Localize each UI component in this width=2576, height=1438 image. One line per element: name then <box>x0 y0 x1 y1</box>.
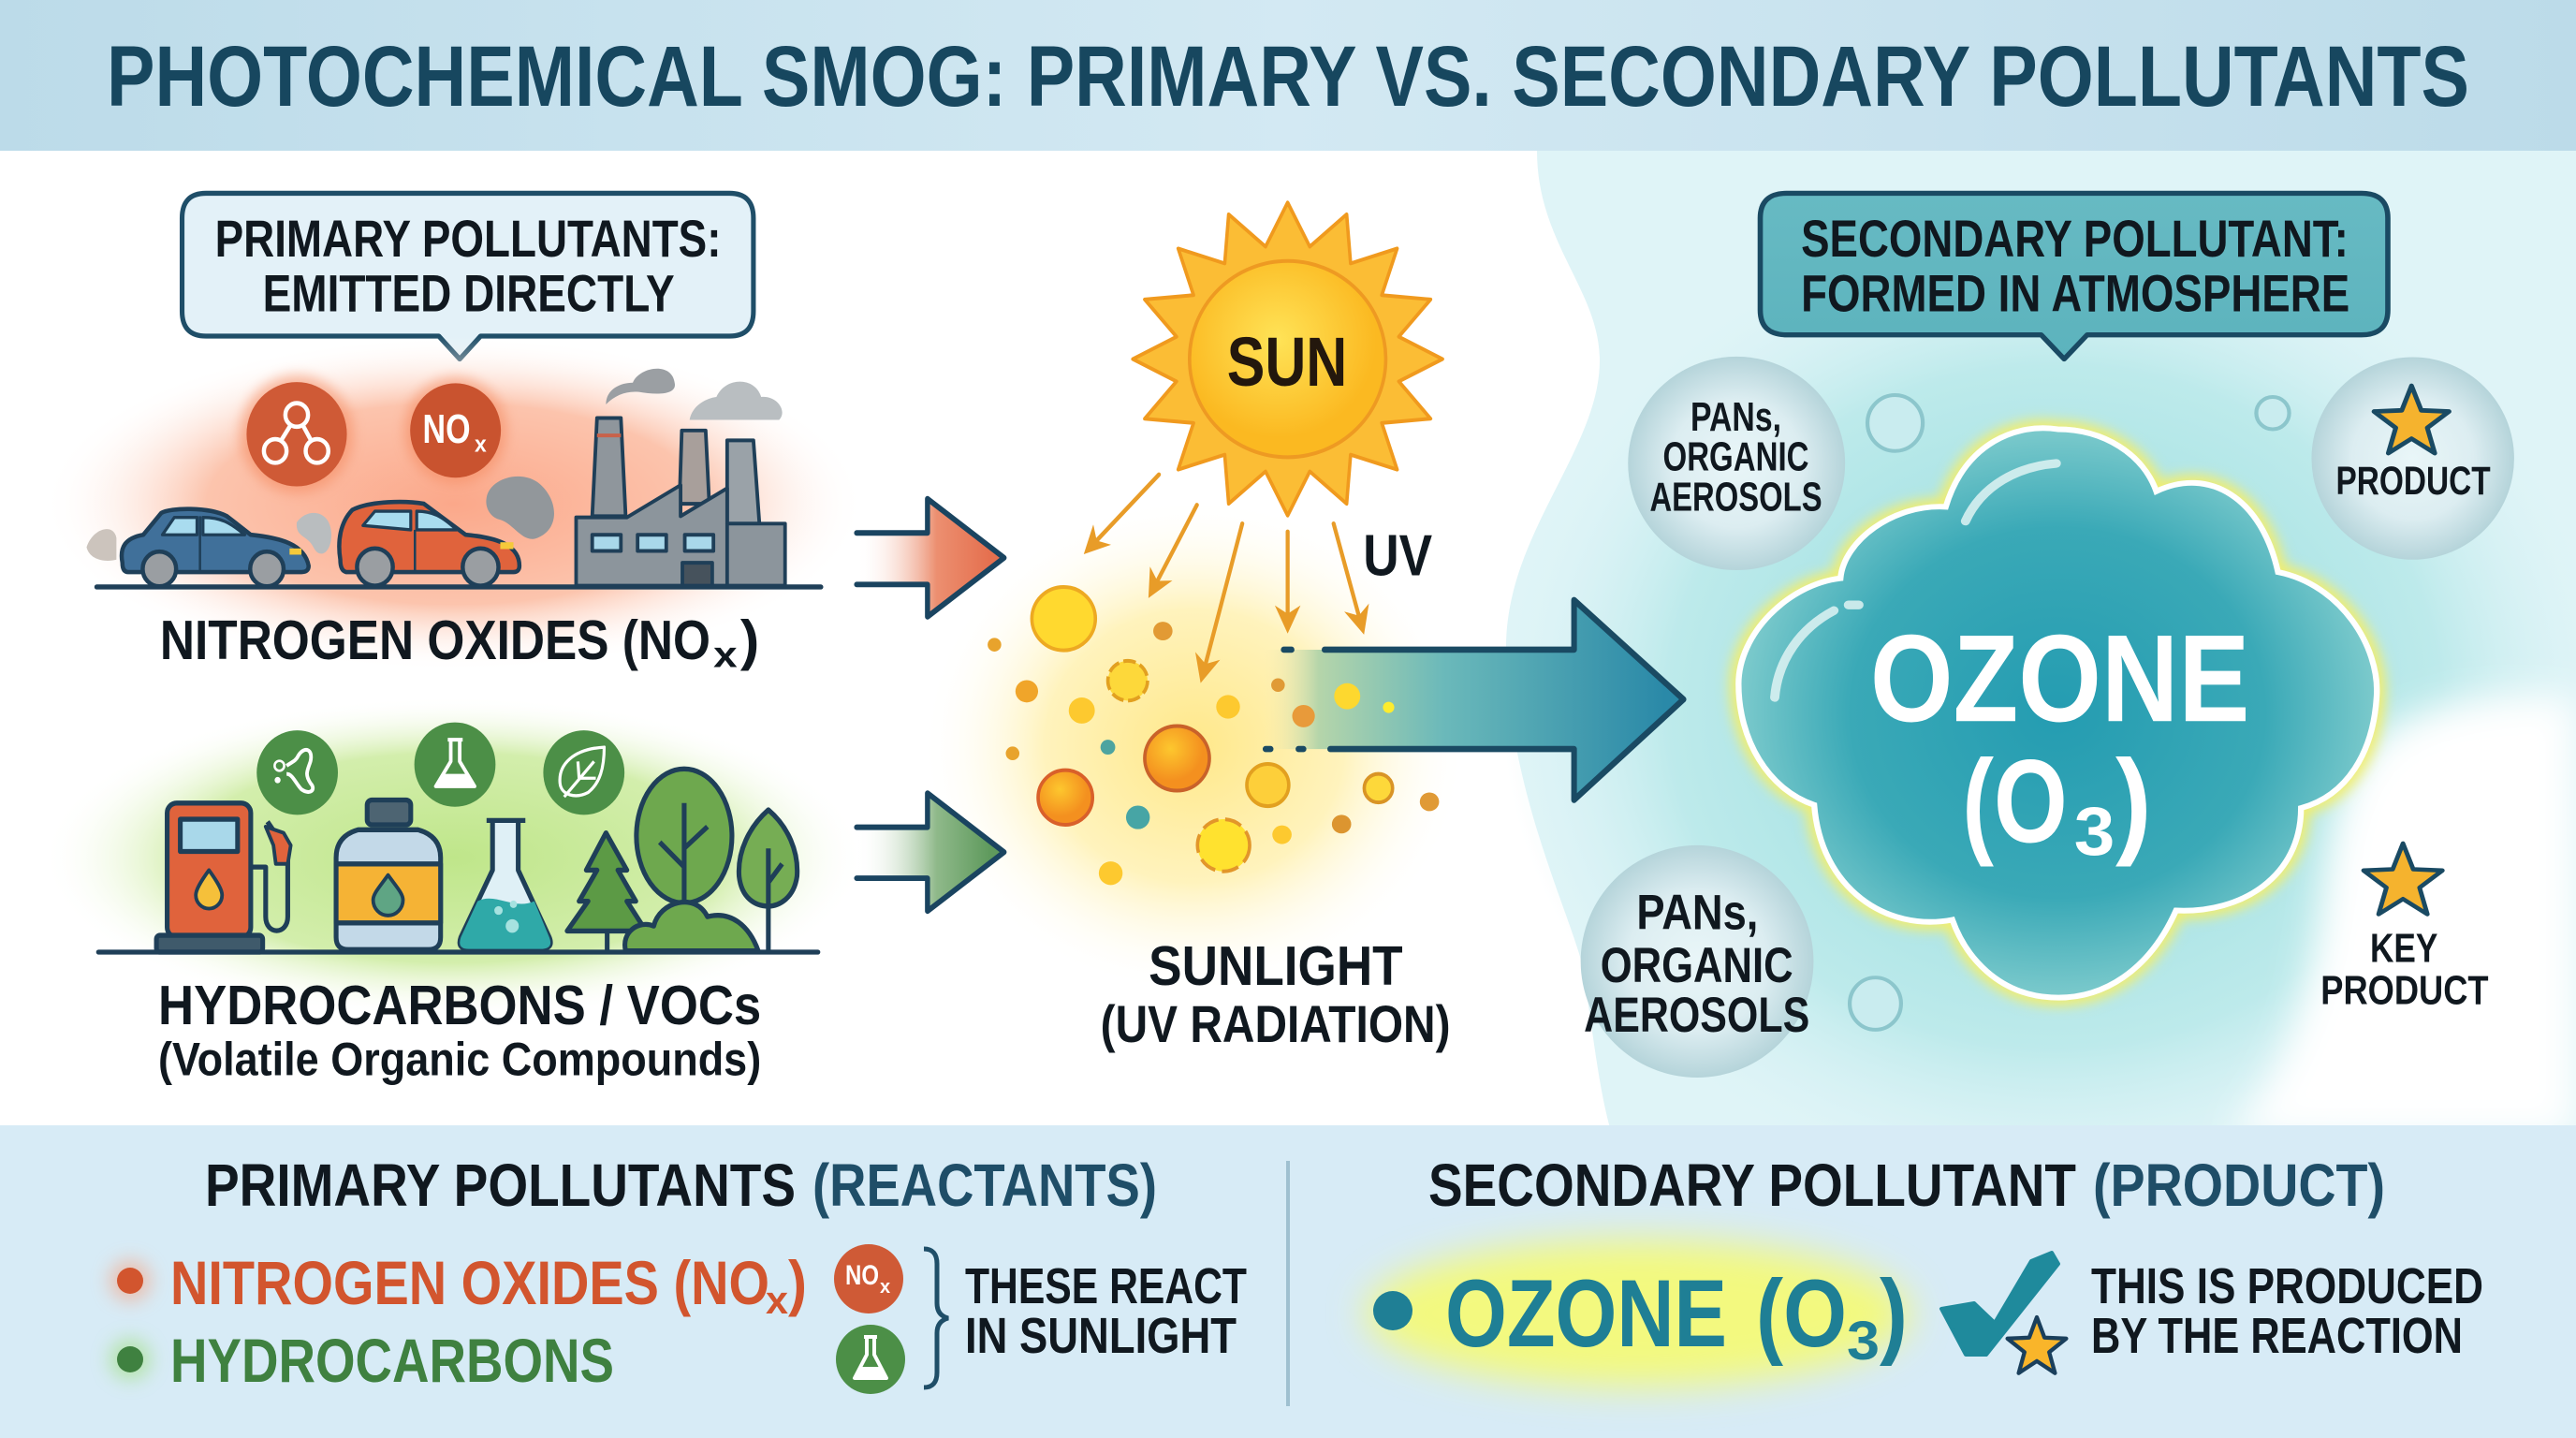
legend: primary pollutants (reactants) <box>110 1152 1247 1395</box>
bubble: PANs organic aerosols (lower): AEROSOLS <box>1584 987 1809 1043</box>
note: this is produced by the reaction: THIS IS PRODUCED <box>2091 1258 2483 1314</box>
ground line <box>98 948 818 956</box>
note: this is produced by the reaction <box>2091 1258 2483 1364</box>
smoke <box>86 369 783 561</box>
icon: NOx badge <box>834 1244 903 1313</box>
heading: secondary pollutant: (PRODUCT) <box>2093 1152 2385 1219</box>
icon: chemical bottle <box>336 800 441 949</box>
icon: NOx badge: NO <box>423 406 471 452</box>
item: hydrocarbons: HYDROCARBONS <box>170 1326 614 1395</box>
icon: sun: SUN <box>1227 324 1347 402</box>
callout: secondary pollutant formed in atmosphere <box>1761 193 2388 360</box>
label: hydrocarbons / VOCs: (Volatile Organic Compounds) <box>158 1033 761 1086</box>
ozone cloud <box>1738 428 2377 998</box>
icon: molecule <box>240 375 354 493</box>
icon: NOx badge: x <box>475 432 487 456</box>
bubble: PANs organic aerosols (upper): AEROSOLS <box>1649 474 1822 520</box>
bubble: PANs organic aerosols (lower): ORGANIC <box>1601 937 1793 992</box>
item: nitrogen oxides: x <box>766 1278 789 1322</box>
item: nitrogen oxides: ) <box>788 1248 807 1317</box>
scene: nitrogen oxides sources <box>42 336 866 671</box>
sunlight glow <box>922 497 1466 994</box>
note: these react in sunlight <box>965 1258 1247 1364</box>
ground line <box>96 583 821 591</box>
icon: flask badge <box>836 1325 905 1394</box>
icon: NOx badge <box>404 377 506 484</box>
item: ozone highlight: OZONE <box>1445 1260 1727 1367</box>
big arrow: reaction to ozone <box>1262 600 1684 800</box>
icon: leaf badge <box>543 730 624 814</box>
icon: flask <box>460 820 550 949</box>
label: hydrocarbons / VOCs: HYDROCARBONS / VOCs <box>158 975 761 1036</box>
item: ozone highlight: ) <box>1880 1260 1908 1367</box>
label: sunlight <box>1101 935 1451 1054</box>
icon: hydrocarbon molecule <box>256 730 338 814</box>
item: ozone highlight: 3 <box>1847 1311 1880 1372</box>
icon: blue car <box>122 509 309 586</box>
arrow: primary to reaction (orange) <box>856 499 1004 617</box>
label: sunlight: SUNLIGHT <box>1149 935 1403 998</box>
label: nitrogen oxides: NITROGEN OXIDES (NO <box>160 609 710 671</box>
item: nitrogen oxides: NITROGEN OXIDES (NO <box>170 1248 769 1317</box>
bubble: product: PRODUCT <box>2335 459 2491 504</box>
icon: fuel pump <box>156 803 291 952</box>
legend: secondary pollutant (product) <box>1367 1152 2483 1387</box>
reacting particles <box>988 587 1439 885</box>
note: these react in sunlight: THESE REACT <box>965 1258 1247 1314</box>
heading: primary pollutants: (REACTANTS) <box>812 1152 1157 1219</box>
heading: secondary pollutant: SECONDARY POLLUTANT <box>1428 1152 2076 1219</box>
scene: hydrocarbon sources <box>42 697 866 1020</box>
label: sunlight: (UV RADIATION) <box>1101 996 1451 1054</box>
UV rays <box>1088 475 1363 678</box>
note: this is produced by the reaction: BY THE REACTION <box>2091 1308 2463 1364</box>
label: O3 formula: 3 <box>2074 793 2115 869</box>
label: UV: UV <box>1363 522 1432 588</box>
icon: trees <box>567 769 798 951</box>
label: nitrogen oxides: ) <box>740 609 759 671</box>
label: key product <box>2320 844 2489 1013</box>
callout: primary pollutants emitted directly <box>183 193 754 360</box>
label: key product: KEY <box>2370 925 2437 971</box>
panel: bottom summary <box>0 1125 2576 1438</box>
icon: NOx badge: NO <box>845 1260 879 1291</box>
icon: beaker badge <box>415 723 495 807</box>
arrow: hydrocarbons to reaction (green) <box>856 793 1004 911</box>
bubble: PANs organic aerosols (upper): ORGANIC <box>1663 433 1809 479</box>
icon: NOx badge: x <box>880 1277 890 1298</box>
brace <box>924 1249 948 1387</box>
item: ozone highlight <box>1367 1240 1910 1387</box>
bubble: PANs organic aerosols (lower): PANs, <box>1636 885 1758 940</box>
panel: primary pollutants <box>42 193 866 1086</box>
callout: secondary pollutant formed in atmosphere: SECONDARY POLLUTANT: <box>1801 211 2349 269</box>
icon: orange car <box>339 502 520 586</box>
label: ozone: OZONE <box>1870 609 2249 747</box>
bubble: PANs organic aerosols (lower) <box>1581 845 1813 1078</box>
bubble: PANs organic aerosols (upper) <box>1628 357 1845 570</box>
label: nitrogen oxides: x <box>713 635 738 675</box>
bubble: product <box>2311 358 2514 560</box>
label: O3 formula: (O <box>1962 735 2068 868</box>
item: ozone highlight: (O <box>1756 1260 1847 1367</box>
label: O3 formula: ) <box>2115 735 2152 868</box>
panel: atmosphere background <box>1502 151 2576 1194</box>
small bubbles <box>1850 395 2290 1030</box>
heading: primary pollutants: PRIMARY POLLUTANTS <box>205 1152 796 1219</box>
icon: factory <box>576 418 785 586</box>
panel: sunlight reaction <box>856 202 1684 1054</box>
note: these react in sunlight: IN SUNLIGHT <box>965 1308 1237 1364</box>
icon: sun <box>1133 202 1442 516</box>
callout: secondary pollutant formed in atmosphere: FORMED IN ATMOSPHERE <box>1801 265 2349 323</box>
panel: secondary pollutant <box>1581 193 2514 1078</box>
title band <box>0 0 2576 151</box>
label: key product: PRODUCT <box>2320 967 2489 1013</box>
callout: primary pollutants emitted directly: EMITTED DIRECTLY <box>263 265 675 323</box>
icon: check mark with star <box>1941 1253 2066 1373</box>
bubble: PANs organic aerosols (upper): PANs, <box>1690 393 1781 440</box>
label: hydrocarbons / VOCs <box>158 975 761 1086</box>
callout: primary pollutants emitted directly: PRIMARY POLLUTANTS: <box>215 210 721 268</box>
